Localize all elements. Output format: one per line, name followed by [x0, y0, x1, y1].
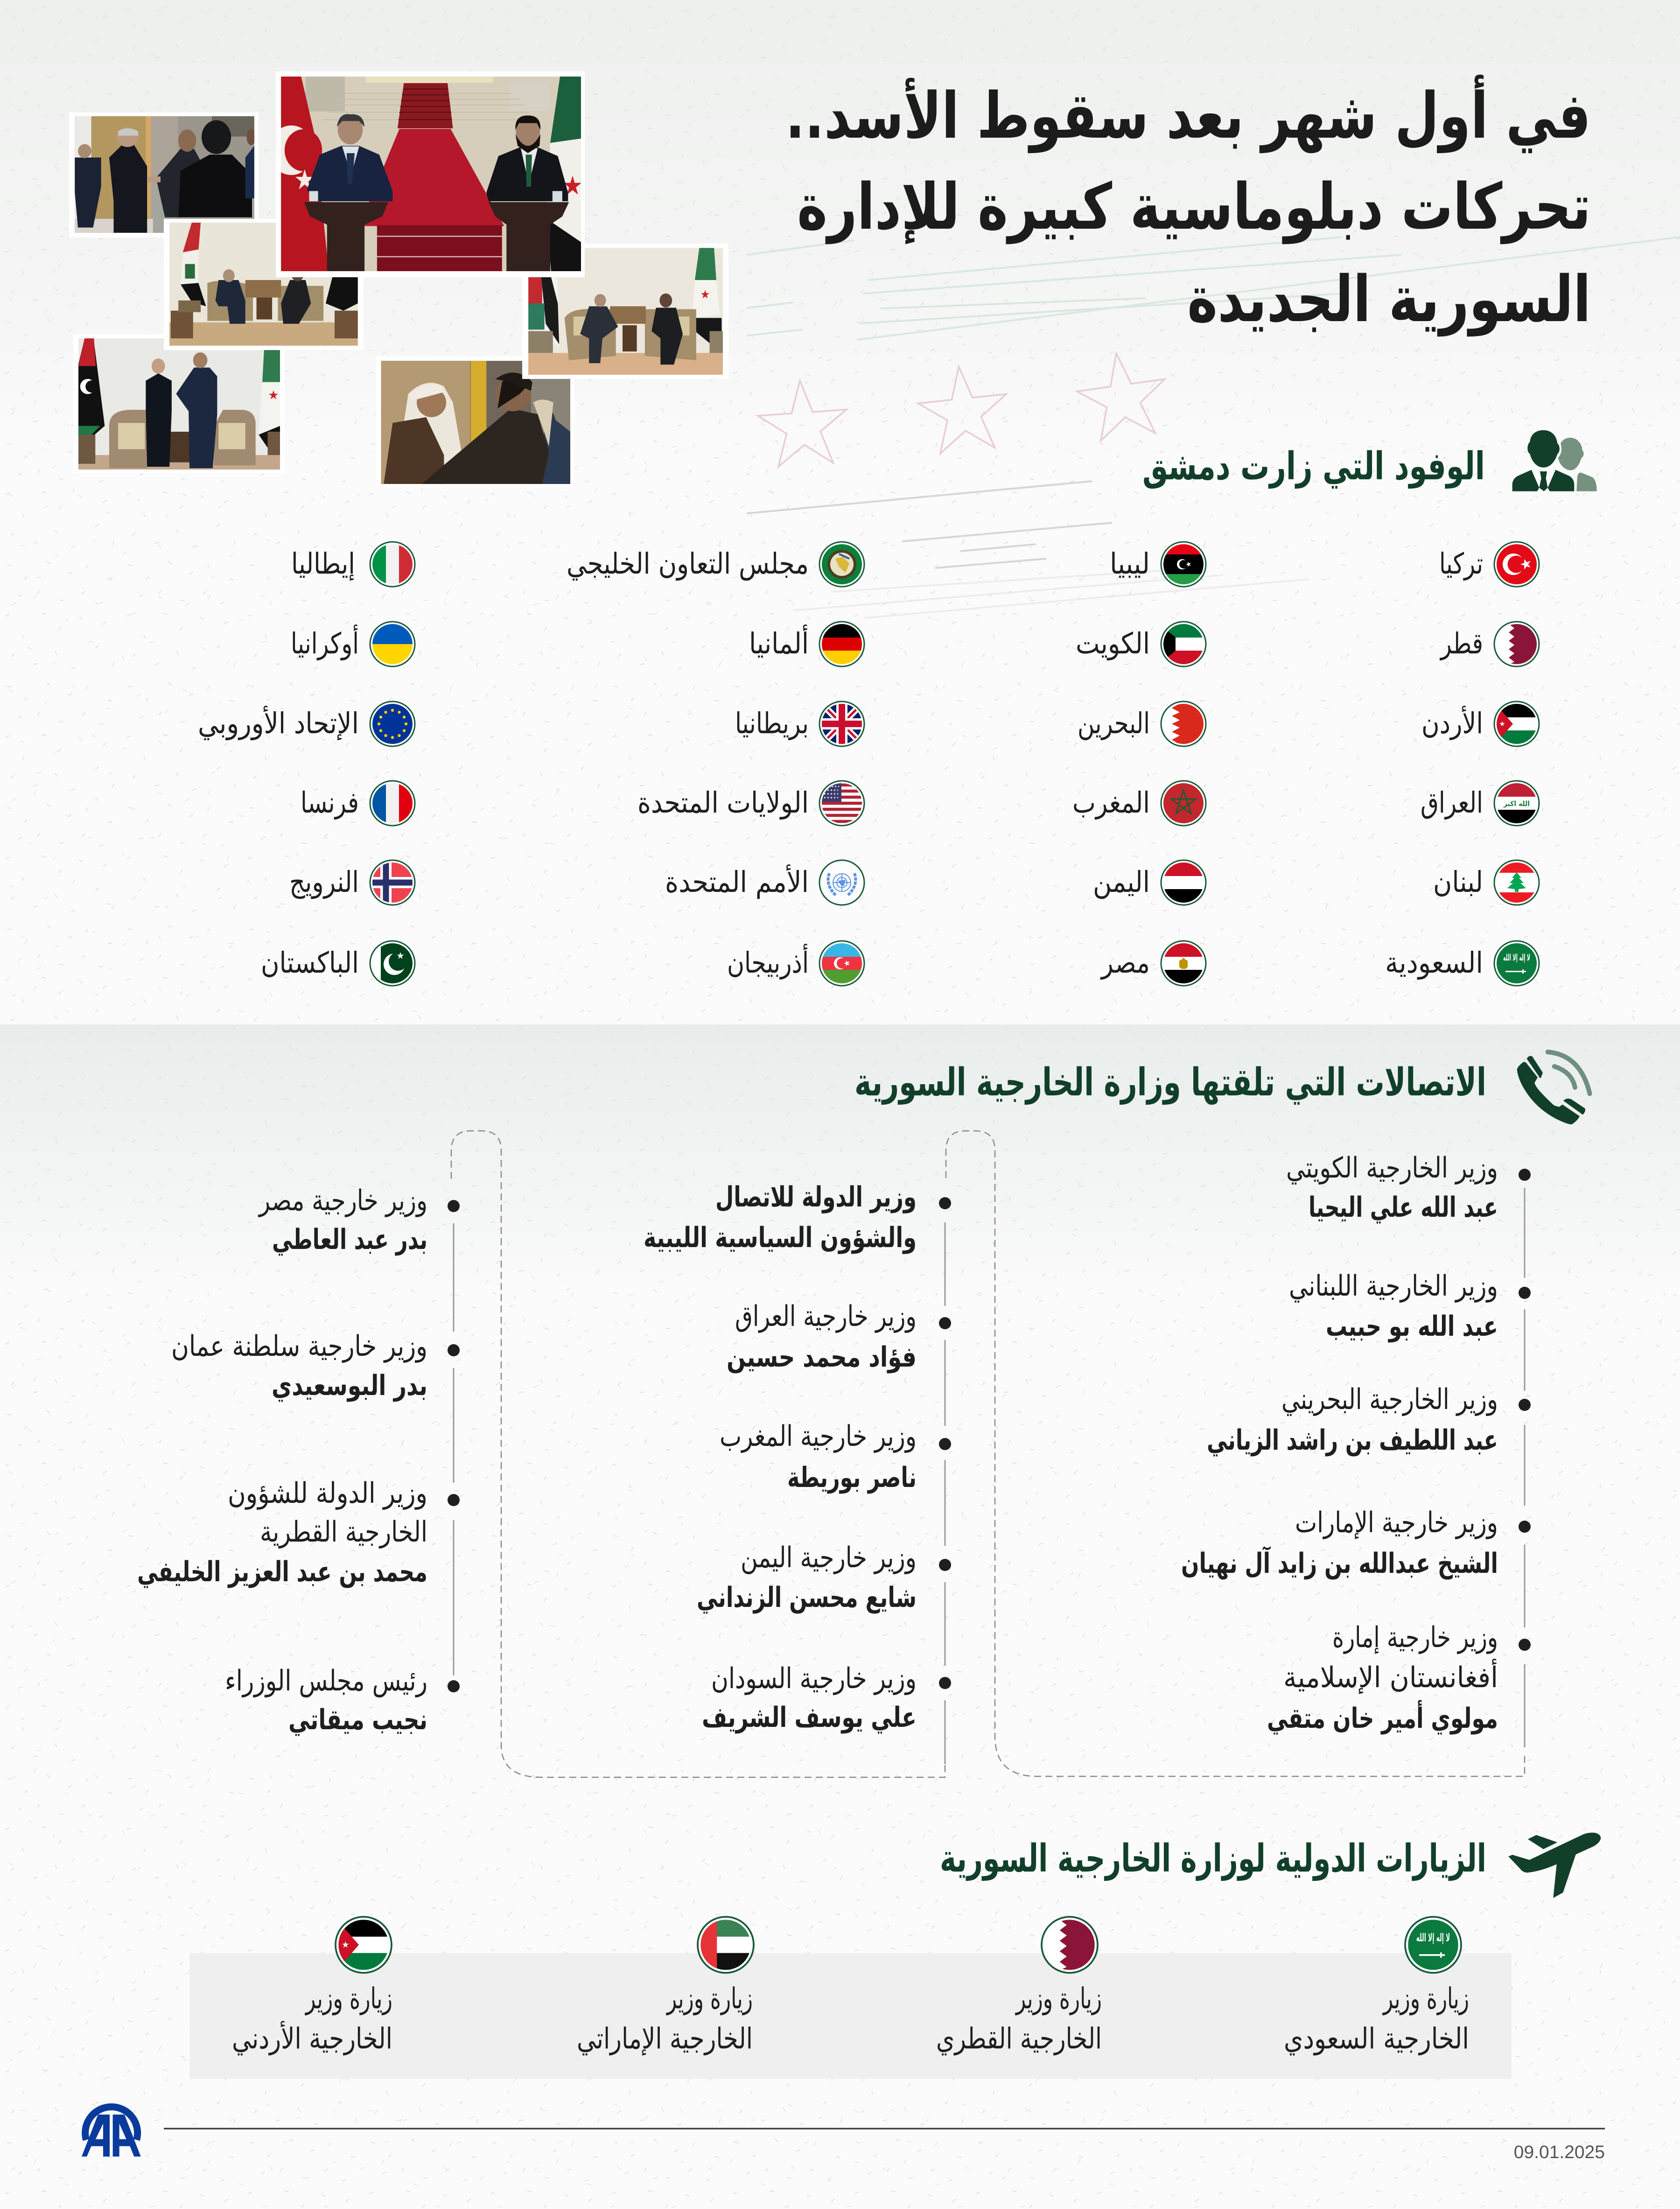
calls column 2 [644, 1181, 951, 1764]
item: GCC: مجلس التعاون الخليجي [567, 547, 809, 581]
flag: Qatar [1042, 1917, 1098, 1973]
photo: Libya delegation [73, 334, 285, 473]
flag: Azerbaijan [819, 941, 864, 986]
flag: Lebanon [1494, 860, 1539, 905]
heading: phone calls [854, 1052, 1590, 1124]
visit: Saudi foreign minister: الخارجية السعودي [1284, 2021, 1469, 2055]
entry: Sudan foreign minister [702, 1662, 951, 1734]
entry: Qatar minister of state: الخارجية القطرية [260, 1515, 427, 1549]
item: Qatar: قطر [1440, 626, 1483, 660]
item: Libya: ليبيا [1110, 547, 1150, 581]
item: Egypt: مصر [1100, 946, 1150, 980]
entry: Egypt foreign minister: بدر عبد العاطي [272, 1223, 427, 1256]
flag: Bahrain [1161, 701, 1206, 746]
item: Azerbaijan: أذربيجان [727, 944, 809, 980]
item: Ukraine: أوكرانيا [291, 624, 359, 660]
flag: UAE [698, 1917, 754, 1973]
visit: Jordanian foreign minister [232, 1917, 392, 2055]
flag: United Nations [819, 860, 864, 905]
entry: Sudan foreign minister: وزير خارجية السودان [711, 1662, 917, 1695]
entry: Libya minister of state: والشؤون السياسية الليبية [644, 1221, 917, 1254]
heading: phone calls: الاتصالات التي تلقتها وزارة الخارجية السورية [854, 1060, 1486, 1105]
visit: Saudi foreign minister: زيارة وزير [1382, 1981, 1469, 2015]
entry: Lebanon foreign minister [1289, 1269, 1531, 1343]
item: United States: الولايات المتحدة [637, 785, 809, 820]
heading: delegations: الوفود التي زارت دمشق [1142, 444, 1485, 489]
flag: Saudi Arabia: لا إله إلا الله [1503, 953, 1530, 963]
visit: Jordanian foreign minister: الخارجية الأردني [232, 2020, 392, 2055]
item: Pakistan [261, 941, 415, 986]
flag: Libya [1161, 542, 1206, 587]
heading: international visits: الزيارات الدولية لوزارة الخارجية السورية [940, 1837, 1486, 1881]
item: United States [637, 781, 864, 826]
photo: joint press conference [269, 71, 585, 277]
visit: Qatari foreign minister: زيارة وزير [1015, 1981, 1102, 2015]
visit: Qatari foreign minister: الخارجية القطري [936, 2021, 1102, 2055]
entry: UAE foreign minister [1181, 1506, 1531, 1580]
entry: Egypt foreign minister [258, 1184, 460, 1256]
flag: France [370, 781, 415, 826]
entry: Afghanistan foreign minister [1267, 1621, 1531, 1735]
entry: Lebanon prime minister [225, 1664, 460, 1736]
entry: Lebanon foreign minister: عبد الله بو حبيب [1326, 1310, 1498, 1343]
visit: UAE foreign minister: الخارجية الإماراتي [577, 2021, 753, 2056]
entry: UAE foreign minister: الشيخ عبدالله بن زايد آل نهيان [1181, 1546, 1498, 1580]
item: Lebanon: لبنان [1433, 865, 1483, 899]
item: Libya [1110, 542, 1206, 587]
item: European Union: الإتحاد الأوروبي [198, 705, 359, 741]
item: Germany [749, 622, 864, 666]
entry: Sudan foreign minister: علي يوسف الشريف [702, 1701, 917, 1734]
entry: Kuwait foreign minister: وزير الخارجية الكويتي [1286, 1151, 1498, 1185]
flag: Saudi Arabia: لا إله إلا الله [1416, 1931, 1450, 1945]
item: United Nations [665, 860, 864, 905]
panel: visits band [189, 1917, 1512, 2079]
timeline dashed frames [451, 1131, 1525, 1777]
entry: Lebanon prime minister: رئيس مجلس الوزراء [225, 1664, 427, 1697]
entry: Morocco foreign minister [720, 1420, 951, 1494]
entry: Oman foreign minister [171, 1330, 460, 1402]
item: United Kingdom [735, 701, 864, 746]
entry: Yemen foreign minister: شايع محسن الزنداني [697, 1581, 917, 1614]
flag: European Union [370, 701, 415, 746]
item: Bahrain: البحرين [1078, 706, 1150, 740]
item: Saudi Arabia: السعودية [1385, 946, 1483, 980]
item: Yemen [1093, 860, 1206, 905]
calls column 3 [137, 1184, 460, 1736]
title: السورية الجديدة [1187, 263, 1591, 337]
footer rule [164, 2128, 1605, 2129]
item: Saudi Arabia [1385, 941, 1539, 986]
item: Iraq [1421, 781, 1539, 826]
entry: Bahrain foreign minister: وزير الخارجية البحريني [1281, 1383, 1498, 1416]
item: Norway: النرويج [289, 865, 359, 899]
visit: UAE foreign minister [577, 1917, 754, 2056]
photo: Iraqi delegation seated [164, 219, 364, 350]
entry: Oman foreign minister: وزير خارجية سلطنة عمان [171, 1330, 427, 1363]
entry: UAE foreign minister: وزير خارجية الإمارات [1295, 1506, 1498, 1540]
icon: two people [1512, 430, 1597, 491]
entry: Bahrain foreign minister: عبد اللطيف بن راشد الزياني [1207, 1424, 1498, 1457]
item: France: فرنسا [301, 785, 359, 820]
calls column 1 [1181, 1151, 1531, 1747]
flag: Pakistan [370, 941, 415, 986]
entry: Afghanistan foreign minister: أفغانستان الإسلامية [1283, 1659, 1498, 1695]
entry: Yemen foreign minister: وزير خارجية اليمن [741, 1541, 917, 1574]
item: Jordan [1421, 701, 1539, 746]
visit: Jordanian foreign minister: زيارة وزير [305, 1981, 392, 2015]
flag: Yemen [1161, 860, 1206, 905]
entry: Qatar minister of state [137, 1477, 460, 1588]
flag: Iraq [1494, 781, 1539, 826]
entry: Lebanon foreign minister: وزير الخارجية اللبناني [1289, 1269, 1498, 1303]
entry: Qatar minister of state: وزير الدولة للشؤون [228, 1477, 427, 1510]
item: Germany: ألمانيا [749, 624, 809, 660]
item: Turkey: تركيا [1439, 547, 1483, 581]
item: Pakistan: الباكستان [261, 946, 359, 980]
item: France [301, 781, 415, 826]
flag: Gulf Cooperation Council [819, 542, 864, 587]
visit: Saudi foreign minister [1284, 1917, 1469, 2055]
flag: Egypt [1161, 941, 1206, 986]
flag: Kuwait [1161, 622, 1206, 666]
item: Yemen: اليمن [1093, 865, 1150, 899]
flag: Turkey [1494, 542, 1539, 587]
entry: Oman foreign minister: بدر البوسعيدي [272, 1369, 427, 1402]
item: Lebanon [1433, 860, 1539, 905]
item: Bahrain [1078, 701, 1206, 746]
entry: Libya minister of state [644, 1181, 951, 1254]
entry: Iraq foreign minister [727, 1300, 951, 1374]
entry: Qatar minister of state: محمد بن عبد العزيز الخليفي [137, 1556, 427, 1588]
item: Kuwait: الكويت [1076, 626, 1150, 660]
entry: Kuwait foreign minister [1286, 1151, 1531, 1224]
heading: international visits [940, 1833, 1601, 1898]
visit: UAE foreign minister: زيارة وزير [666, 1981, 753, 2015]
logo: Anadolu Agency [82, 2107, 141, 2157]
flag: Italy [370, 542, 415, 587]
item: Azerbaijan [727, 941, 864, 986]
item: European Union [198, 701, 415, 746]
entry: Bahrain foreign minister [1207, 1383, 1531, 1457]
flag: Ukraine [370, 622, 415, 666]
item: Turkey [1439, 542, 1539, 587]
item: Egypt [1100, 941, 1206, 986]
entry: Egypt foreign minister: وزير خارجية مصر [258, 1184, 427, 1217]
icon: phone [1517, 1052, 1590, 1124]
entry: Iraq foreign minister: فؤاد محمد حسين [727, 1341, 917, 1374]
item: Ukraine [291, 622, 415, 666]
item: Iraq: العراق [1421, 785, 1483, 820]
photo: Qatari envoy greeting [376, 357, 574, 487]
item: Kuwait [1076, 622, 1206, 666]
entry: Morocco foreign minister: وزير خارجية المغرب [720, 1420, 917, 1453]
entry: Yemen foreign minister [697, 1541, 951, 1614]
item: Jordan: الأردن [1421, 705, 1483, 740]
date: 09.01.2025 [1514, 2142, 1605, 2162]
flag: Qatar [1494, 622, 1539, 666]
flag: Iraq: الله اكبر [1503, 799, 1530, 808]
item: Morocco [1072, 781, 1206, 826]
flag: United States [819, 781, 864, 826]
item: Italy: إيطاليا [291, 547, 355, 581]
item: Italy [291, 542, 415, 587]
flag: Saudi Arabia [1405, 1917, 1461, 1973]
flag: Morocco [1161, 781, 1206, 826]
item: Morocco: المغرب [1072, 785, 1150, 820]
entry: Kuwait foreign minister: عبد الله علي اليحيا [1309, 1191, 1498, 1224]
photo collage [69, 71, 728, 487]
entry: Libya minister of state: وزير الدولة للاتصال [715, 1181, 917, 1213]
entry: Morocco foreign minister: ناصر بوريطة [787, 1461, 917, 1494]
title [785, 75, 1591, 337]
photo: handshake in corridor [69, 112, 259, 238]
flag: United Kingdom [819, 701, 864, 746]
visit: Qatari foreign minister [936, 1917, 1102, 2055]
entry: Lebanon prime minister: نجيب ميقاتي [288, 1704, 427, 1736]
item: Qatar [1440, 622, 1539, 666]
delegation list [198, 542, 1539, 986]
flag: Norway [370, 860, 415, 905]
icon: airplane [1508, 1833, 1601, 1898]
entry: Afghanistan foreign minister: وزير خارجية إمارة [1332, 1621, 1498, 1655]
photo: Jordanian delegation seated [522, 244, 728, 379]
flag: Jordan [336, 1917, 392, 1973]
entry: Afghanistan foreign minister: مولوي أمير خان متقي [1267, 1700, 1498, 1735]
item: United Nations: الأمم المتحدة [665, 864, 809, 899]
entry: Iraq foreign minister: وزير خارجية العراق [735, 1300, 917, 1333]
flag: Germany [819, 622, 864, 666]
decorative stars [756, 347, 1172, 468]
item: Norway [289, 860, 415, 905]
timeline line [453, 1223, 455, 1676]
flag: Saudi Arabia [1494, 941, 1539, 986]
flag: Jordan [1494, 701, 1539, 746]
timeline line [1524, 1188, 1525, 1747]
item: United Kingdom: بريطانيا [735, 706, 809, 740]
